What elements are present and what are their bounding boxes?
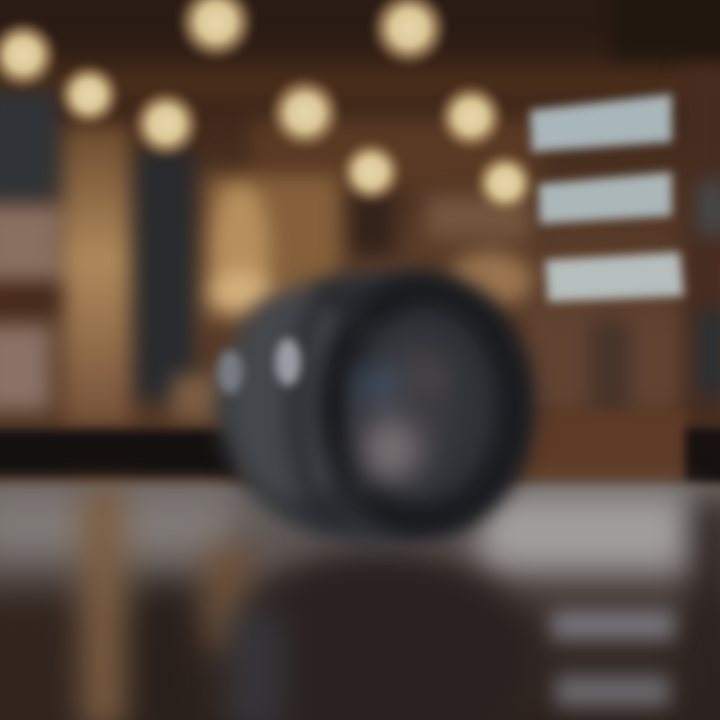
windows xyxy=(530,94,684,302)
tyre xyxy=(216,272,528,544)
background wall xyxy=(0,0,720,500)
right wall wood panel xyxy=(350,70,720,430)
counter xyxy=(0,412,720,486)
ceiling beams xyxy=(0,0,720,190)
floor xyxy=(0,484,720,720)
tyre reflection xyxy=(228,550,530,720)
ceiling lights xyxy=(0,0,537,215)
left shelves and pillars xyxy=(0,90,340,425)
